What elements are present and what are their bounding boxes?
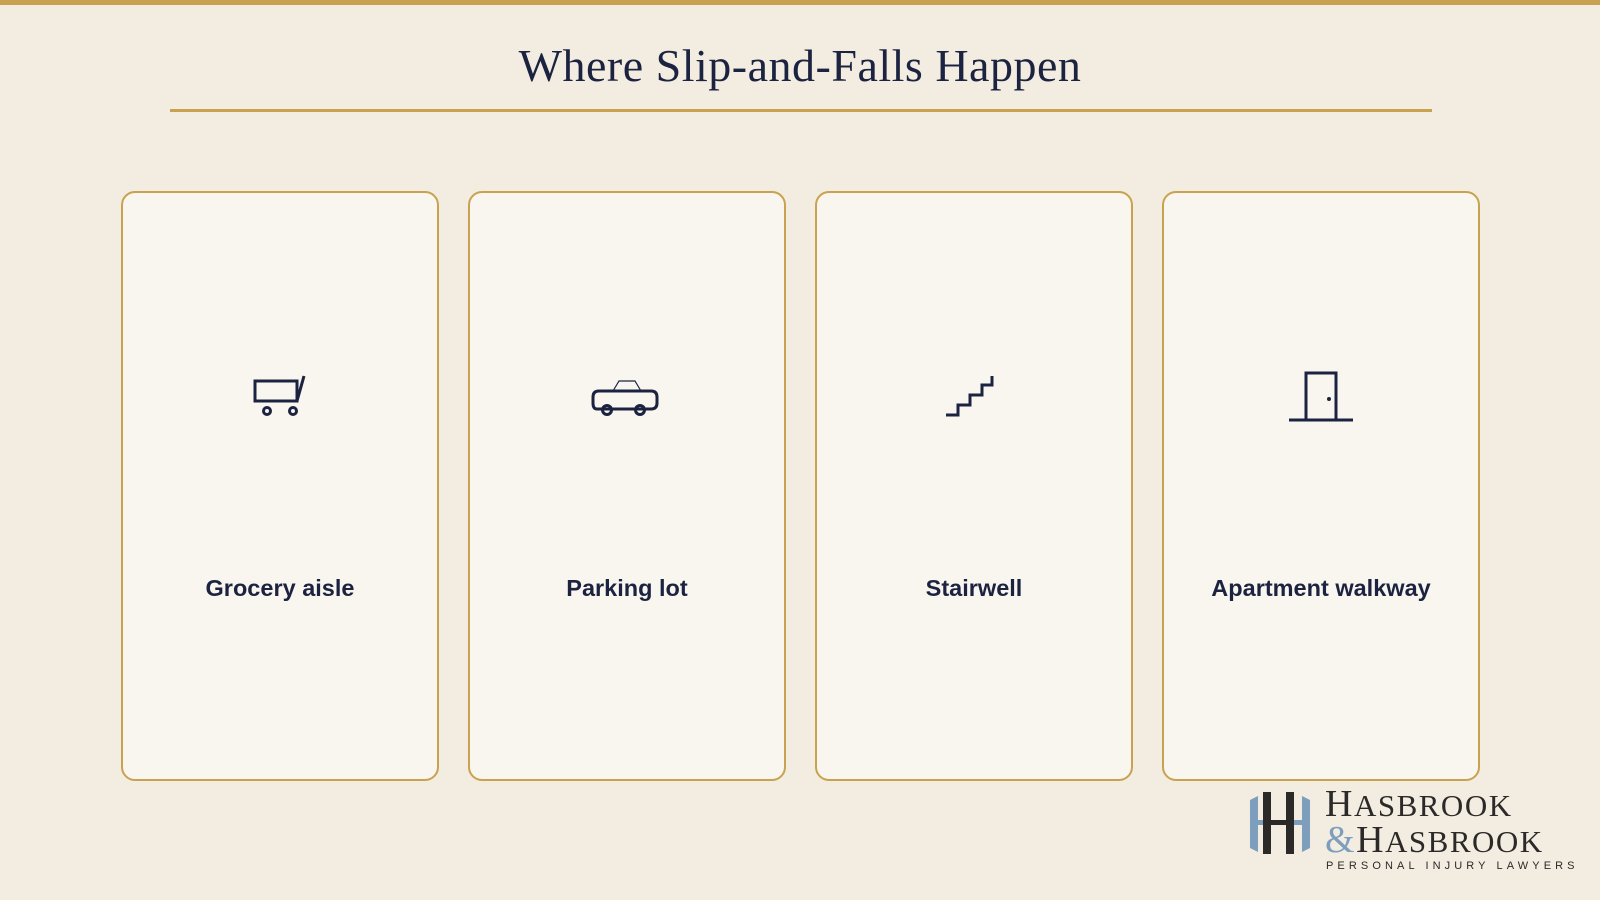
logo — [1250, 783, 1579, 872]
top bar — [0, 0, 1600, 5]
label: Grocery aisle — [206, 575, 354, 601]
logo mark — [1250, 792, 1310, 854]
panel: apartment walkway — [1162, 191, 1480, 781]
panel: parking lot — [468, 191, 786, 781]
icon: car — [592, 380, 658, 416]
label: Stairwell — [926, 575, 1022, 601]
icon: cart — [254, 376, 306, 416]
logo text: HASBROOK — [1325, 783, 1513, 825]
label: Parking lot — [566, 575, 688, 601]
icon: door — [1289, 372, 1353, 422]
label: Apartment walkway — [1211, 575, 1431, 601]
title: Where Slip-and-Falls Happen — [519, 40, 1081, 91]
icon: stairs — [946, 376, 994, 416]
logo text — [1325, 783, 1544, 861]
panel: grocery aisle — [121, 191, 439, 781]
logo text: &HASBROOK — [1325, 819, 1544, 861]
tagline: PERSONAL INJURY LAWYERS — [1326, 860, 1579, 872]
panel: stairwell — [815, 191, 1133, 781]
title underline — [170, 109, 1432, 112]
